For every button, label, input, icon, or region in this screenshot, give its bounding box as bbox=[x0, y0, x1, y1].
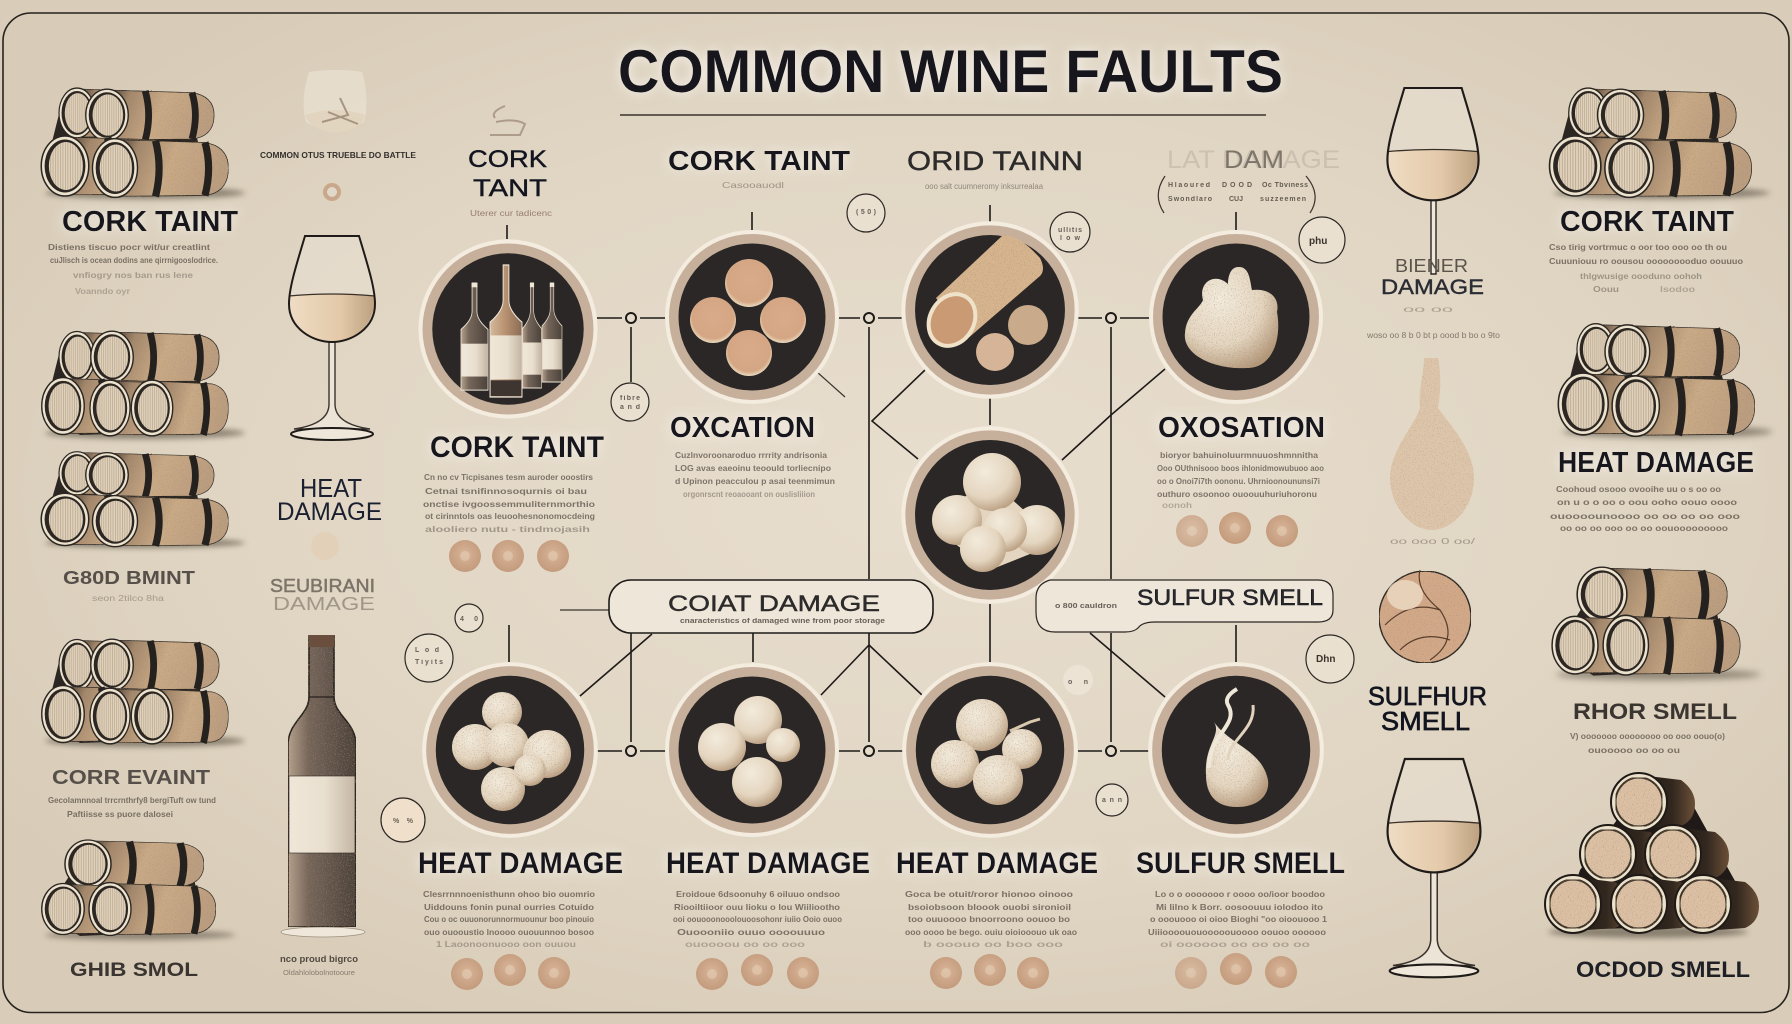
icon: cork rock bbox=[1379, 570, 1471, 663]
heading: faded label bbox=[270, 576, 375, 614]
heading: SULFUR SMELL bbox=[1136, 847, 1345, 880]
small annotation badges: %% bbox=[393, 818, 414, 825]
small annotation badges: 4 0 bbox=[460, 616, 478, 623]
title: COMMON WINE FAULTS bbox=[618, 38, 1283, 105]
text block bbox=[1550, 484, 1740, 533]
text block bbox=[48, 795, 216, 819]
icon: faint saucer bbox=[490, 106, 525, 135]
callout: sulfur smell pill: o 800 cauldron bbox=[1055, 603, 1117, 610]
circle: mushroom lumps bbox=[665, 663, 839, 837]
icon: cork bundle 5 bbox=[42, 840, 235, 940]
text block: cuJlisch is ocean dodins ane qirrnigooslodrice. bbox=[50, 255, 218, 265]
text block: ot cirinntols oas leuoohesnonomocdeing bbox=[425, 511, 595, 521]
caption: ooo salt cuumneromy inksurrealaa bbox=[925, 182, 1044, 191]
heading: heat damage: HEAT DAMAGE bbox=[1558, 447, 1754, 479]
callout: bracketed note: CUJ bbox=[1229, 196, 1243, 203]
heading: heat damage bbox=[277, 473, 382, 526]
heading: sulfhur smell: SULFHUR bbox=[1368, 681, 1487, 711]
icon: faint peach bbox=[311, 532, 339, 560]
title rule bbox=[620, 114, 1266, 116]
callout: bracketed note bbox=[1158, 176, 1315, 213]
panel: bottom heat damage 1 bbox=[418, 847, 623, 990]
circle: oxidised blob bbox=[1149, 230, 1323, 404]
heading: hior smell: RHOR SMELL bbox=[1573, 699, 1737, 724]
icon tokens bbox=[451, 954, 570, 990]
text block: Uiiioooououooooouoooo oouoo oooooo bbox=[1148, 927, 1326, 937]
text block: bioryor bahuinoluurmnuuoshmnnitha bbox=[1160, 450, 1318, 460]
small annotation badges: low bbox=[1060, 235, 1081, 242]
text block: oonoh bbox=[1162, 500, 1192, 510]
text block: bsoiobsoon bloook ouobi sironioil bbox=[908, 902, 1071, 912]
text block: on u o o oo o oou ooho oouo oooo bbox=[1557, 497, 1737, 507]
small annotation badges: Lod bbox=[415, 647, 439, 654]
heading: HEAT DAMAGE bbox=[666, 847, 870, 880]
panel: bottom heat damage 2 bbox=[666, 847, 870, 990]
text block bbox=[48, 242, 218, 296]
connector nodes bbox=[626, 313, 1116, 756]
small annotation badges: phu bbox=[1309, 236, 1327, 247]
text block: outhuro osoonoo ouoouuhuriuhoronu bbox=[1157, 489, 1317, 499]
panel: central fault circles bbox=[418, 221, 1324, 838]
text block: V) ooooooo oooooooo oo ooo oouo(o) bbox=[1570, 731, 1725, 741]
callout: sulfur smell pill bbox=[1036, 580, 1333, 632]
icon: cork bundle 7 bbox=[1558, 324, 1772, 438]
small annotation badges: Dhn bbox=[1316, 654, 1335, 665]
text block: Cso tirig vortrmuc o oor too ooo oo th ou bbox=[1549, 242, 1727, 252]
callout: sulfur smell pill: SULFUR SMELL bbox=[1137, 585, 1323, 610]
text block: Cuuuniouu ro oousou ooooooooduo oouuuo bbox=[1549, 256, 1743, 266]
caption: oo ooo 0 oo/ bbox=[1390, 537, 1476, 546]
text block bbox=[1157, 450, 1324, 510]
text block: too ouuoooo bnoorroono oouoo bo bbox=[908, 914, 1070, 924]
heading: good daint: G80D BMINT bbox=[63, 568, 195, 588]
circle: cork stopper bbox=[901, 221, 1079, 399]
text block: LOG avas eaeoinu teoould torliecnipo bbox=[675, 463, 831, 473]
circle: sulfur smoke bbox=[1148, 662, 1324, 838]
panel: second left column bbox=[260, 70, 416, 977]
callout: coat damage pill: COIAT DAMAGE bbox=[668, 591, 880, 616]
icon: faint tumbler bbox=[304, 70, 367, 133]
heading: orid tainn: ORID TAINN bbox=[907, 146, 1083, 176]
text block: orgonrscnt reoaooant on ouslisliiion bbox=[683, 489, 815, 499]
circle: central cluster bbox=[901, 426, 1079, 604]
heading: faded heat damage: LAT DAMAGE bbox=[1167, 146, 1340, 174]
heading: heat damage: HEAT bbox=[300, 473, 362, 503]
text block: Coohoud osooo ovooihe uu o s oo oo bbox=[1556, 484, 1721, 494]
circle: bottles bbox=[418, 239, 598, 419]
heading: CORK TAINT bbox=[430, 431, 604, 464]
heading: OXCATION bbox=[670, 412, 815, 444]
panel: left cork column bbox=[41, 88, 245, 981]
icon tokens bbox=[1175, 953, 1297, 989]
text block: ouooooo oo oo ou bbox=[1588, 745, 1680, 755]
heading: sulfhur smell bbox=[1368, 681, 1487, 736]
text block: ooi oouooonooolouoosohonr iuiio Ooio ouoo bbox=[673, 914, 842, 924]
text block bbox=[423, 889, 595, 949]
callout: bracketed note: suzzeemen bbox=[1260, 196, 1306, 203]
text block: b ooouo oo boo ooo bbox=[923, 939, 1063, 949]
icon: small token bbox=[323, 183, 341, 201]
icon tokens bbox=[696, 954, 819, 990]
small annotation badges: on bbox=[1068, 679, 1088, 686]
small annotation badges: ann bbox=[1102, 797, 1122, 804]
icon: wine glass top right bbox=[1387, 88, 1479, 274]
heading: heat damage: DAMAGE bbox=[277, 498, 382, 526]
heading: cork tant: CORK bbox=[468, 146, 547, 173]
text block bbox=[1570, 731, 1725, 755]
panel: oxosation description bbox=[1157, 412, 1325, 547]
text block: Gecolamnnoal trrcrnthrfy8 bergiTuft ow tund bbox=[48, 795, 216, 805]
heading: cork taint: CORK TAINT bbox=[62, 206, 238, 238]
small annotation badges: fibre bbox=[620, 395, 640, 402]
circle: round balls bbox=[902, 662, 1078, 838]
text block: Ooo OUthnisooo boos ihlonidmowubuoo aoo bbox=[1157, 463, 1324, 473]
icon: wine glass bottom right bbox=[1388, 759, 1480, 977]
text block: ooo oooo be bego. ouiu oioiooouo uk oao bbox=[905, 927, 1077, 937]
caption: bottle bbox=[280, 954, 359, 977]
text block: onctise ivgoossemmuliternmorthio bbox=[423, 499, 595, 509]
small annotation badges: (50) bbox=[856, 209, 876, 216]
text block bbox=[905, 889, 1077, 949]
caption: tumbler: COMMON OTUS TRUEBLE DO BATTLE bbox=[260, 150, 416, 160]
panel: second right column bbox=[1366, 88, 1501, 977]
text block: 1 Laoonoonuooo oon ouuou bbox=[436, 939, 576, 949]
caption: bottle: Oldahlolobolnotooure bbox=[283, 968, 355, 977]
caption: seon 2tilco 8ha bbox=[92, 594, 165, 603]
text block: Clesrrnnnoenisthunn ohoo bio ouomrio bbox=[423, 889, 595, 899]
icon: wine glass left bbox=[289, 236, 375, 440]
heading: cork taint: CORK TAINT bbox=[1560, 206, 1734, 238]
panel: oxcation description bbox=[670, 412, 835, 499]
text block bbox=[673, 889, 842, 949]
icon: cork pyramid bbox=[1545, 773, 1759, 938]
callout: coat damage pill: cnaracteristics of damaged wine from poor storage bbox=[680, 618, 885, 625]
icon: cork bundle 4 bbox=[42, 639, 245, 747]
panel: bottom heat damage 3 bbox=[896, 847, 1098, 989]
caption: bottle: nco proud bigrco bbox=[280, 954, 359, 964]
text block: Uiddouns fonin punal ourries Cotuido bbox=[424, 902, 594, 912]
caption bbox=[1366, 305, 1501, 340]
heading: ocdod smell: OCDOD SMELL bbox=[1576, 957, 1750, 982]
text block: Ouoooniio ouuo oooouuuo bbox=[677, 927, 825, 937]
icon tokens bbox=[930, 954, 1049, 989]
text block: oo oo oo ooo oo oo oouooooooooo bbox=[1560, 523, 1728, 533]
text block: oi oooooo oo oo oo oo bbox=[1160, 939, 1310, 949]
heading: bitter damage: DAMAGE bbox=[1381, 276, 1484, 299]
heading: HEAT DAMAGE bbox=[896, 847, 1098, 880]
text block: Lo o o ooooooo r oooo oo/ioor boodoo bbox=[1155, 889, 1325, 899]
heading: faded label: DAMAGE bbox=[273, 594, 375, 614]
small annotation badges: ullitis bbox=[1058, 227, 1082, 234]
caption: Casooauodl bbox=[722, 181, 784, 190]
text block: Oouu bbox=[1593, 284, 1619, 294]
icon: cork bundle 8 bbox=[1552, 567, 1761, 680]
heading: HEAT DAMAGE bbox=[418, 847, 623, 880]
text block bbox=[423, 472, 595, 534]
text block: Cuzlnvoroonaroduo rrrrity andrisonia bbox=[675, 450, 827, 460]
small annotation badges: and bbox=[620, 404, 640, 411]
panel: bottom sulfur smell bbox=[1136, 847, 1345, 989]
heading: faded label: SEUBIRANI bbox=[270, 576, 375, 596]
text block: d Upinon peacculou p asai teenmimun bbox=[675, 476, 835, 486]
small annotation badges bbox=[381, 194, 1354, 842]
callout: coat damage pill bbox=[609, 580, 933, 633]
caption: woso oo 8 b 0 bt p oood b bo o 9to bbox=[1366, 331, 1501, 340]
icon: cork bundle 2 bbox=[42, 331, 245, 439]
callout: bracketed note: Hlaoured bbox=[1168, 182, 1210, 189]
text block: Mi lilno k Borr. oosoouuu iolodoo ito bbox=[1156, 902, 1323, 912]
icon tokens bbox=[449, 540, 569, 572]
heading: cork tant bbox=[468, 146, 547, 202]
text block bbox=[675, 450, 835, 499]
panel: right cork column bbox=[1545, 88, 1772, 982]
callout: bracketed note: Swondlaro bbox=[1168, 196, 1212, 203]
panel: top headings of centre bbox=[468, 106, 1340, 218]
text block: ouo ouooustio lnoooo ououunnoo bosoo bbox=[424, 927, 594, 937]
text block: o ooouooo oi oioo Bioghi "oo oioouooo 1 bbox=[1150, 914, 1327, 924]
text block: lsodoo bbox=[1660, 284, 1695, 294]
text block: Paftiisse ss puore dalosei bbox=[67, 809, 173, 819]
heading: corr evaint: CORR EVAINT bbox=[52, 767, 210, 789]
icon: wine bottle bbox=[281, 635, 365, 937]
text block: Cou o oc ouuonorunnormuounur boo pinouio bbox=[424, 914, 594, 924]
callout: bracketed note: Oc Tbviness bbox=[1262, 182, 1308, 189]
caption: oo oo bbox=[1403, 305, 1454, 314]
text block: Cn no cv Ticpisanes tesm auroder ooostirs bbox=[424, 472, 593, 482]
heading: OXOSATION bbox=[1158, 412, 1325, 444]
text block: Riooiltiioor ouu lioku o lou Wiiliootho bbox=[674, 902, 840, 912]
small annotation badges: Tiyits bbox=[415, 659, 443, 666]
heading: sulfhur smell: SMELL bbox=[1381, 706, 1470, 736]
heading: faded heat damage: DAM bbox=[1224, 146, 1284, 174]
text block: Eroidoue 6dsoonuhy 6 oiluuo ondsoo bbox=[676, 889, 840, 899]
heading: bitter damage: BIENER bbox=[1395, 256, 1468, 276]
heading: ghib smol: GHIB SMOL bbox=[70, 960, 198, 981]
circle: cork discs bbox=[665, 230, 839, 404]
heading: cork taint: CORK TAINT bbox=[668, 145, 850, 176]
heading: cork tant: TANT bbox=[473, 175, 547, 202]
icon: cork bundle 3 bbox=[41, 452, 245, 548]
text block bbox=[1549, 242, 1743, 294]
text block: Distiens tiscuo pocr wit/ur creatlint bbox=[48, 242, 210, 252]
panel: cork taint description bbox=[423, 431, 604, 572]
text block: ouoooounoooo oo oo oo oo ooo bbox=[1550, 511, 1740, 521]
icon tokens bbox=[1176, 512, 1298, 547]
heading: bitter damage bbox=[1381, 256, 1484, 299]
caption: Uterer cur tadicenc bbox=[470, 209, 552, 218]
text block: alooliero nutu - tindmojasih bbox=[425, 524, 590, 534]
text block: Goca be otuit/roror hionoo oinooo bbox=[905, 889, 1073, 899]
text block: oo o Onoi7i7th oononu. Uhrnioonoununsi7i bbox=[1157, 476, 1320, 486]
text block: ouoooou oo oo ooo bbox=[685, 939, 805, 949]
text block: Cetnai tsnifinnosoqurnis oi bau bbox=[425, 486, 587, 496]
text block bbox=[1148, 889, 1327, 949]
text block: thlgwusige oooduno oohoh bbox=[1580, 271, 1702, 281]
circle: rough blob bbox=[422, 662, 598, 838]
icon: cork bundle 6 bbox=[1550, 88, 1770, 199]
icon: cork bundle 1 bbox=[41, 88, 245, 199]
text block: vnfiogry nos ban rus lene bbox=[73, 270, 193, 280]
connector network bbox=[507, 205, 1236, 751]
icon: faded gourd cork bbox=[1390, 358, 1474, 530]
text block: Voanndo oyr bbox=[75, 286, 131, 296]
callout: bracketed note: DOOD bbox=[1222, 182, 1252, 189]
